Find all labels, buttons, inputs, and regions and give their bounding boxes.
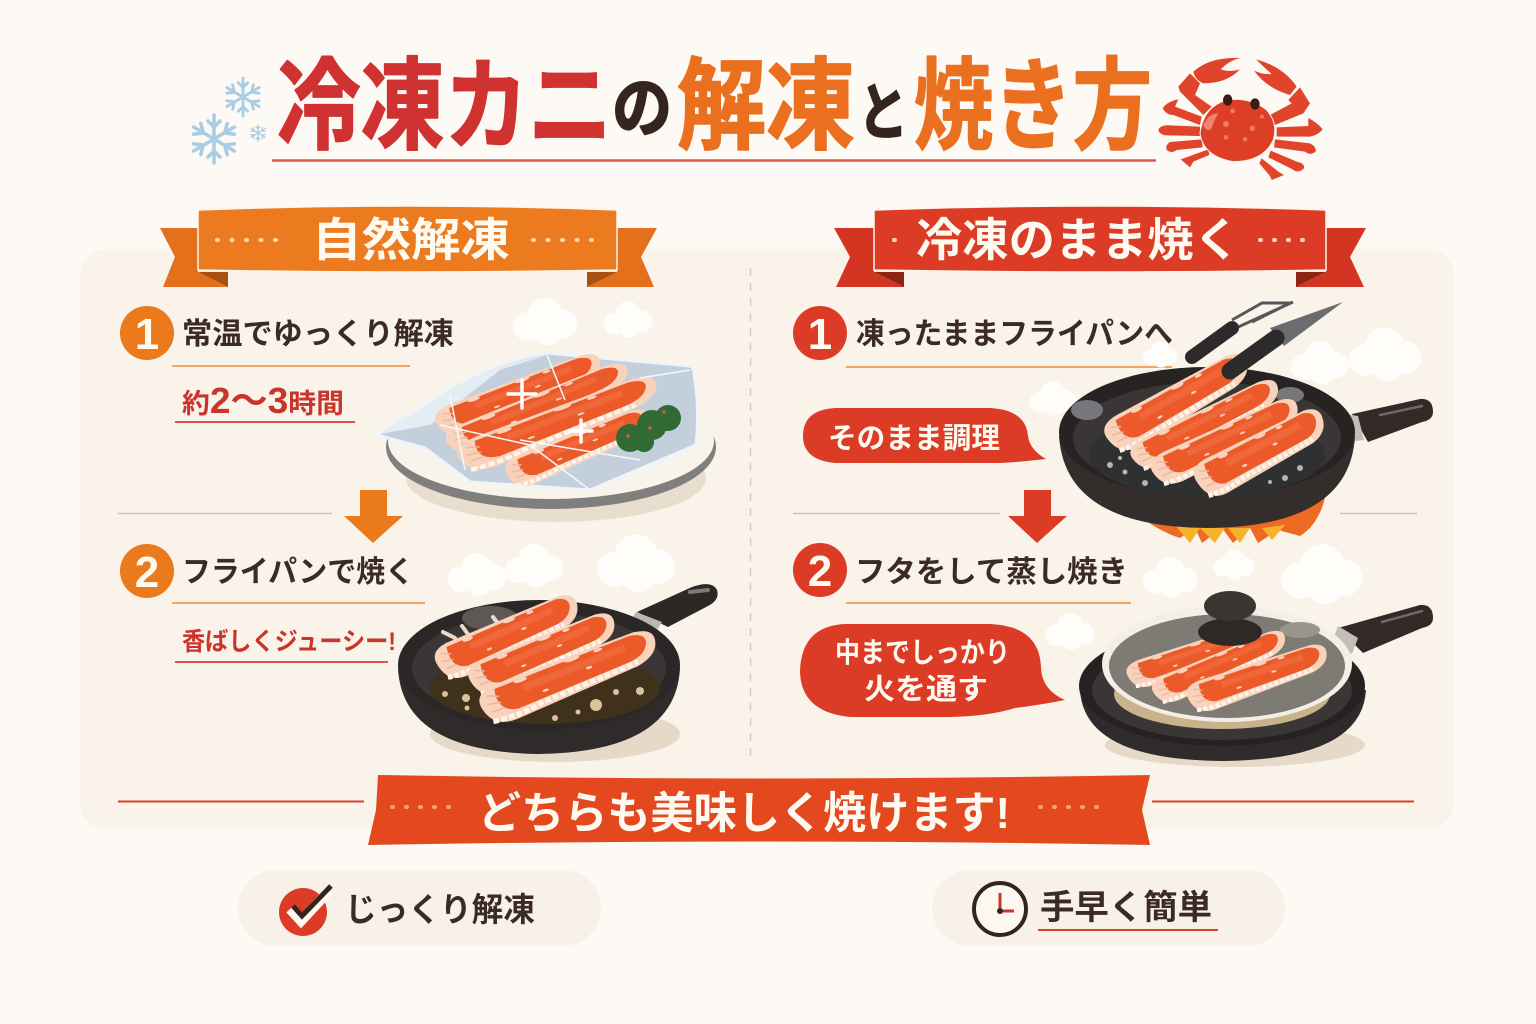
left step 1 badge: 1 [135, 310, 159, 359]
icon: check mark [279, 886, 331, 936]
right step 2 badge [793, 543, 847, 597]
title: の [612, 71, 672, 145]
steam clouds left bottom [448, 534, 675, 596]
title: 解凍 [677, 51, 855, 163]
speech bubble: そのまま調理 [803, 408, 1046, 463]
left step 1 text: 常温でゆっくり解凍 [182, 318, 454, 351]
illustration: pan with crab legs [398, 584, 718, 762]
speech bubble: そのまま調理: そのまま調理 [828, 423, 1000, 455]
icon: snowflakes [194, 78, 265, 163]
left step 1 underline [172, 365, 410, 367]
left step 2 badge [120, 544, 174, 598]
pill: じっくり解凍 [238, 870, 601, 946]
right step 1 badge: 1 [808, 310, 832, 359]
arrow: left down [344, 490, 403, 543]
bottom banner [368, 775, 1150, 845]
pill: 手早く簡単: 手早く簡単 [1040, 889, 1212, 927]
title: と [858, 79, 908, 148]
speech bubble: 中までしっかり火を通す: 火を通す [864, 673, 988, 706]
right step 1 badge [793, 306, 847, 360]
banner: 自然解凍 [160, 206, 657, 287]
title: 焼き方 [914, 51, 1152, 163]
speech bubble: 中までしっかり火を通す: 中までしっかり [835, 637, 1010, 668]
steam clouds left top [513, 298, 653, 345]
left step 2 text: フライパンで焼く [182, 556, 414, 589]
arrow: right down [1008, 490, 1067, 543]
title: 冷凍カニ [277, 51, 612, 163]
left step 2 note: 香ばしくジューシー! [182, 628, 396, 656]
panel: main comparison [80, 249, 1454, 829]
title underline [272, 159, 1156, 162]
icon: clock [974, 883, 1026, 935]
right row divider [793, 512, 1417, 514]
right step 2 underline [846, 602, 1131, 604]
left step 1 duration: 約2〜3時間 [182, 380, 344, 421]
illustration: flame [1130, 498, 1325, 543]
left step 1 badge [120, 306, 174, 360]
steam clouds right top [1030, 328, 1421, 416]
right step 1 text: 凍ったままフライパンへ [856, 318, 1173, 351]
right step 2 text: フタをして蒸し焼き [855, 556, 1128, 589]
left step 2 underline [172, 602, 425, 604]
left row divider [118, 512, 332, 514]
speech bubble: 中までしっかり火を通す [800, 624, 1065, 717]
illustration: frozen crab on plate [377, 350, 716, 522]
center dashed divider [750, 268, 752, 758]
right step 2 badge: 2 [808, 547, 832, 596]
banner: 冷凍のまま焼く: 冷凍のまま焼く [916, 214, 1240, 266]
pill: 手早く簡単 [932, 870, 1285, 946]
banner: 冷凍のまま焼く [834, 206, 1366, 287]
illustration: pan with frozen crab and tongs [1059, 302, 1433, 528]
right step 1 underline [846, 366, 1172, 368]
title [277, 51, 1152, 163]
banner side lines [118, 800, 1414, 802]
illustration: pan with glass lid [1079, 591, 1433, 767]
pill: じっくり解凍: じっくり解凍 [345, 891, 535, 928]
steam clouds right bottom [1045, 544, 1363, 650]
banner: 自然解凍: 自然解凍 [312, 214, 510, 266]
icon: crab [1158, 58, 1323, 180]
bottom banner: どちらも美味しく焼けます! [478, 789, 1010, 838]
left step 2 badge: 2 [135, 548, 159, 597]
